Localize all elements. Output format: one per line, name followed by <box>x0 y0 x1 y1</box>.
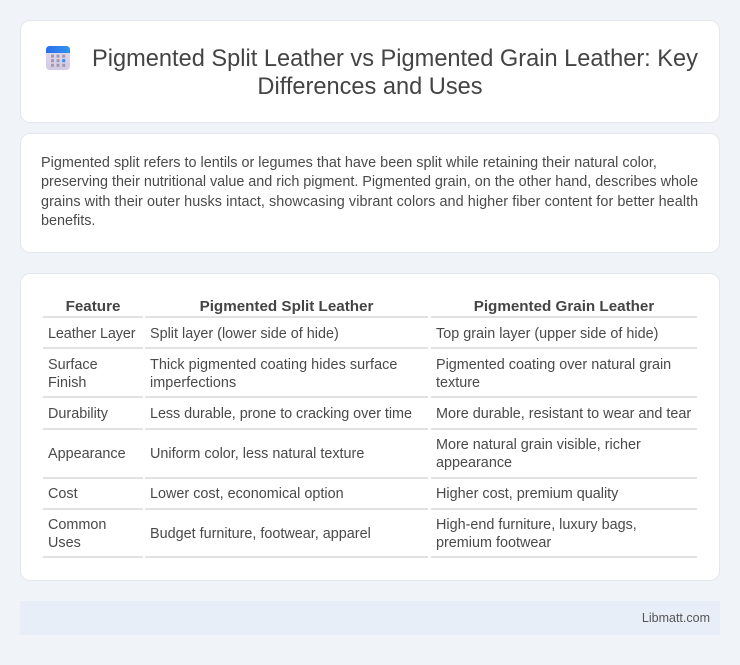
intro text: preserving their nutritional value and rich pigment. Pigmented grain, on the other hand, describes whole <box>41 174 698 190</box>
comparison table: texture <box>436 375 480 391</box>
comparison table: Feature <box>66 298 120 315</box>
comparison table: Pigmented coating over natural grain <box>436 357 671 373</box>
intro text: grains with their outer husks intact, showcasing vibrant colors and higher fiber content for better health <box>41 194 698 210</box>
comparison table: Higher cost, premium quality <box>436 486 618 502</box>
title: Differences and Uses <box>257 74 483 100</box>
comparison table: Leather Layer <box>48 326 136 342</box>
comparison table: High-end furniture, luxury bags, <box>436 517 637 533</box>
title card <box>20 20 720 123</box>
intro card <box>20 133 720 253</box>
comparison table: More natural grain visible, richer <box>436 437 641 453</box>
intro text <box>41 155 698 229</box>
comparison table: imperfections <box>150 375 236 391</box>
comparison table: Common <box>48 517 106 533</box>
comparison table: Uniform color, less natural texture <box>150 446 364 462</box>
footer brand: Libmatt.com <box>642 611 710 625</box>
comparison table: Pigmented Split Leather <box>200 298 373 315</box>
comparison table: Pigmented Grain Leather <box>474 298 654 315</box>
comparison table: Uses <box>48 535 81 551</box>
intro text: benefits. <box>41 213 95 229</box>
comparison table: Less durable, prone to cracking over time <box>150 406 412 422</box>
comparison table: Thick pigmented coating hides surface <box>150 357 397 373</box>
title: Pigmented Split Leather vs Pigmented Grain Leather: Key <box>92 46 698 72</box>
table card <box>20 273 720 581</box>
title <box>92 46 698 100</box>
comparison table: Budget furniture, footwear, apparel <box>150 526 371 542</box>
comparison table: Appearance <box>48 446 126 462</box>
comparison table: Lower cost, economical option <box>150 486 344 502</box>
comparison table: Surface <box>48 357 98 373</box>
comparison table: Cost <box>48 486 78 502</box>
comparison table: Durability <box>48 406 108 422</box>
icon: calendar <box>46 46 70 70</box>
comparison table: Split layer (lower side of hide) <box>150 326 339 342</box>
comparison table: More durable, resistant to wear and tear <box>436 406 691 422</box>
comparison table <box>43 298 697 558</box>
comparison table: appearance <box>436 455 512 471</box>
comparison table: Finish <box>48 375 86 391</box>
comparison table: Top grain layer (upper side of hide) <box>436 326 658 342</box>
comparison table: premium footwear <box>436 535 551 551</box>
intro text: Pigmented split refers to lentils or legumes that have been split while retaining their natural color, <box>41 155 657 171</box>
footer bar <box>20 601 720 635</box>
